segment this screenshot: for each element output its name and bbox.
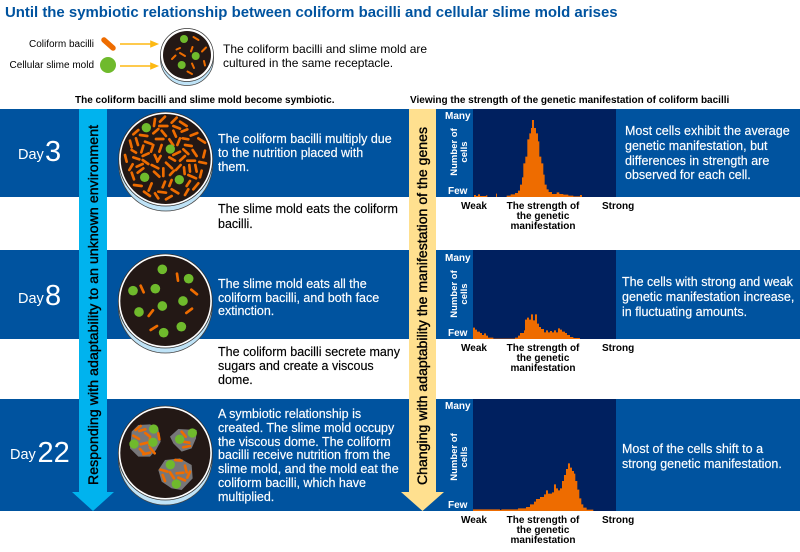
text: day 3 chart note: Most cells exhibit the average (625, 124, 790, 138)
text: day 8 chart note: genetic manifestation increase, (622, 290, 794, 304)
chart labels: Many (445, 253, 471, 264)
text: day 3 upper: them. (218, 160, 249, 174)
chart labels: Number of (449, 269, 460, 318)
text: day 22: slime mold, and the mold eat the (218, 462, 399, 476)
axis labels: manifestation (510, 363, 576, 374)
arrow: changing with adaptability (401, 109, 444, 511)
text: day 22 chart note: strong genetic manifestation. (622, 457, 782, 471)
axis labels: the genetic (517, 211, 570, 222)
chart labels: Many (445, 111, 471, 122)
axis labels (461, 343, 634, 374)
label: day 22: 22 (38, 437, 70, 469)
chart labels: Number of (449, 432, 460, 481)
text: day 3 lower: bacilli. (218, 217, 253, 231)
chart labels: cells (459, 141, 470, 163)
chart labels: Few (448, 186, 468, 197)
chart labels: Number of (449, 127, 460, 176)
axis labels: manifestation (510, 221, 576, 232)
label: day 8: Day (18, 291, 44, 307)
chart labels: Few (448, 328, 468, 339)
band: day 22 (0, 399, 800, 511)
text: day 3 upper: to the nutrition placed with (218, 146, 363, 160)
arrow: bacillus to dish (120, 42, 157, 46)
axis labels: Weak (461, 201, 487, 212)
text: day 3 chart note: differences in strength are (625, 154, 769, 168)
label: day 22: Day (10, 447, 36, 463)
text: day 3 chart note: observed for each cell. (625, 168, 751, 182)
axis labels: Strong (602, 201, 634, 212)
chart labels (445, 253, 471, 339)
chart labels (445, 401, 471, 511)
chart labels: cells (459, 283, 470, 305)
axis labels: The strength of (507, 515, 580, 526)
label: day 3: Day (18, 147, 44, 163)
text: day 22: bacilli receive nutrition from the (218, 448, 390, 462)
chart labels (445, 111, 471, 197)
text: day 22: A symbiotic relationship is (218, 407, 361, 421)
heading: right column: Viewing the strength of the genetic manifestation of coliform bacilli (410, 95, 730, 106)
text: day 22: created. The slime mold occupy (218, 421, 395, 435)
chart labels: Many (445, 401, 471, 412)
axis labels: the genetic (517, 353, 570, 364)
dish: day 22, symbiotic domes (118, 406, 212, 505)
vertical label: responding: Responding with adaptability to an unknown environment (85, 125, 101, 485)
axis labels (461, 515, 634, 546)
arrow: responding with adaptability (72, 109, 114, 511)
text: culture description: cultured in the same receptacle. (223, 56, 393, 70)
label: cellular slime mold: Cellular slime mold (10, 60, 94, 71)
text: day 3 upper: The coliform bacilli multiply due (218, 132, 392, 146)
icon: coliform bacillus (104, 40, 113, 48)
text: day 3 chart note: genetic manifestation, but (625, 139, 768, 153)
chart labels: cells (459, 446, 470, 468)
chart: day 3 histogram (445, 109, 634, 232)
text: day 8 chart note: in fluctuating amounts. (622, 305, 747, 319)
chart labels: Few (448, 500, 468, 511)
arrow: slime mold to dish (120, 64, 157, 68)
axis labels: Strong (602, 515, 634, 526)
band: day 3 (0, 109, 800, 197)
text: day 22: the viscous dome. The coliform (218, 435, 391, 449)
text: day 22: multiplied. (218, 490, 274, 504)
dish: day 8, few bacilli (118, 254, 212, 353)
chart: day 22 histogram (445, 399, 634, 546)
chart: day 8 histogram (445, 250, 634, 374)
band: day 8 (0, 250, 800, 339)
text: day 8 lower: dome. (218, 373, 253, 387)
title: Until the symbiotic relationship between coliform bacilli and cellular slime mold arises (5, 4, 618, 21)
axis labels: manifestation (510, 535, 576, 546)
label: day 8: 8 (45, 280, 61, 312)
text: day 22: coliform bacilli, which have (218, 476, 366, 490)
axis labels: Strong (602, 343, 634, 354)
dish: day 3, many bacilli (119, 112, 213, 211)
axis labels: The strength of (507, 343, 580, 354)
text: day 8 upper: The slime mold eats all the (218, 277, 367, 291)
text: day 8 chart note: The cells with strong and weak (622, 275, 794, 289)
legend: ingredients (10, 28, 427, 86)
label: day 3: 3 (45, 136, 61, 168)
icon: culture dish with both organisms (160, 28, 214, 86)
heading: left column: The coliform bacilli and slime mold become symbiotic. (75, 95, 335, 106)
vertical label: changing: Changing with adaptability the manifestation of the genes (414, 127, 430, 485)
icon: slime mold (100, 57, 116, 73)
text: culture description: The coliform bacilli and slime mold are (223, 42, 427, 56)
axis labels: Weak (461, 515, 487, 526)
text: day 22 chart note: Most of the cells shift to a (622, 442, 763, 456)
text: day 8 lower: The coliform bacilli secrete many (218, 345, 401, 359)
text: day 8 lower: sugars and create a viscous (218, 359, 374, 373)
text: day 8 upper: extinction. (218, 304, 274, 318)
axis labels: The strength of (507, 201, 580, 212)
text: day 8 upper: coliform bacilli, and both face (218, 291, 379, 305)
axis labels (461, 201, 634, 232)
label: coliform bacilli: Coliform bacilli (29, 39, 94, 50)
text: day 3 lower: The slime mold eats the coliform (218, 202, 398, 216)
axis labels: Weak (461, 343, 487, 354)
axis labels: the genetic (517, 525, 570, 536)
